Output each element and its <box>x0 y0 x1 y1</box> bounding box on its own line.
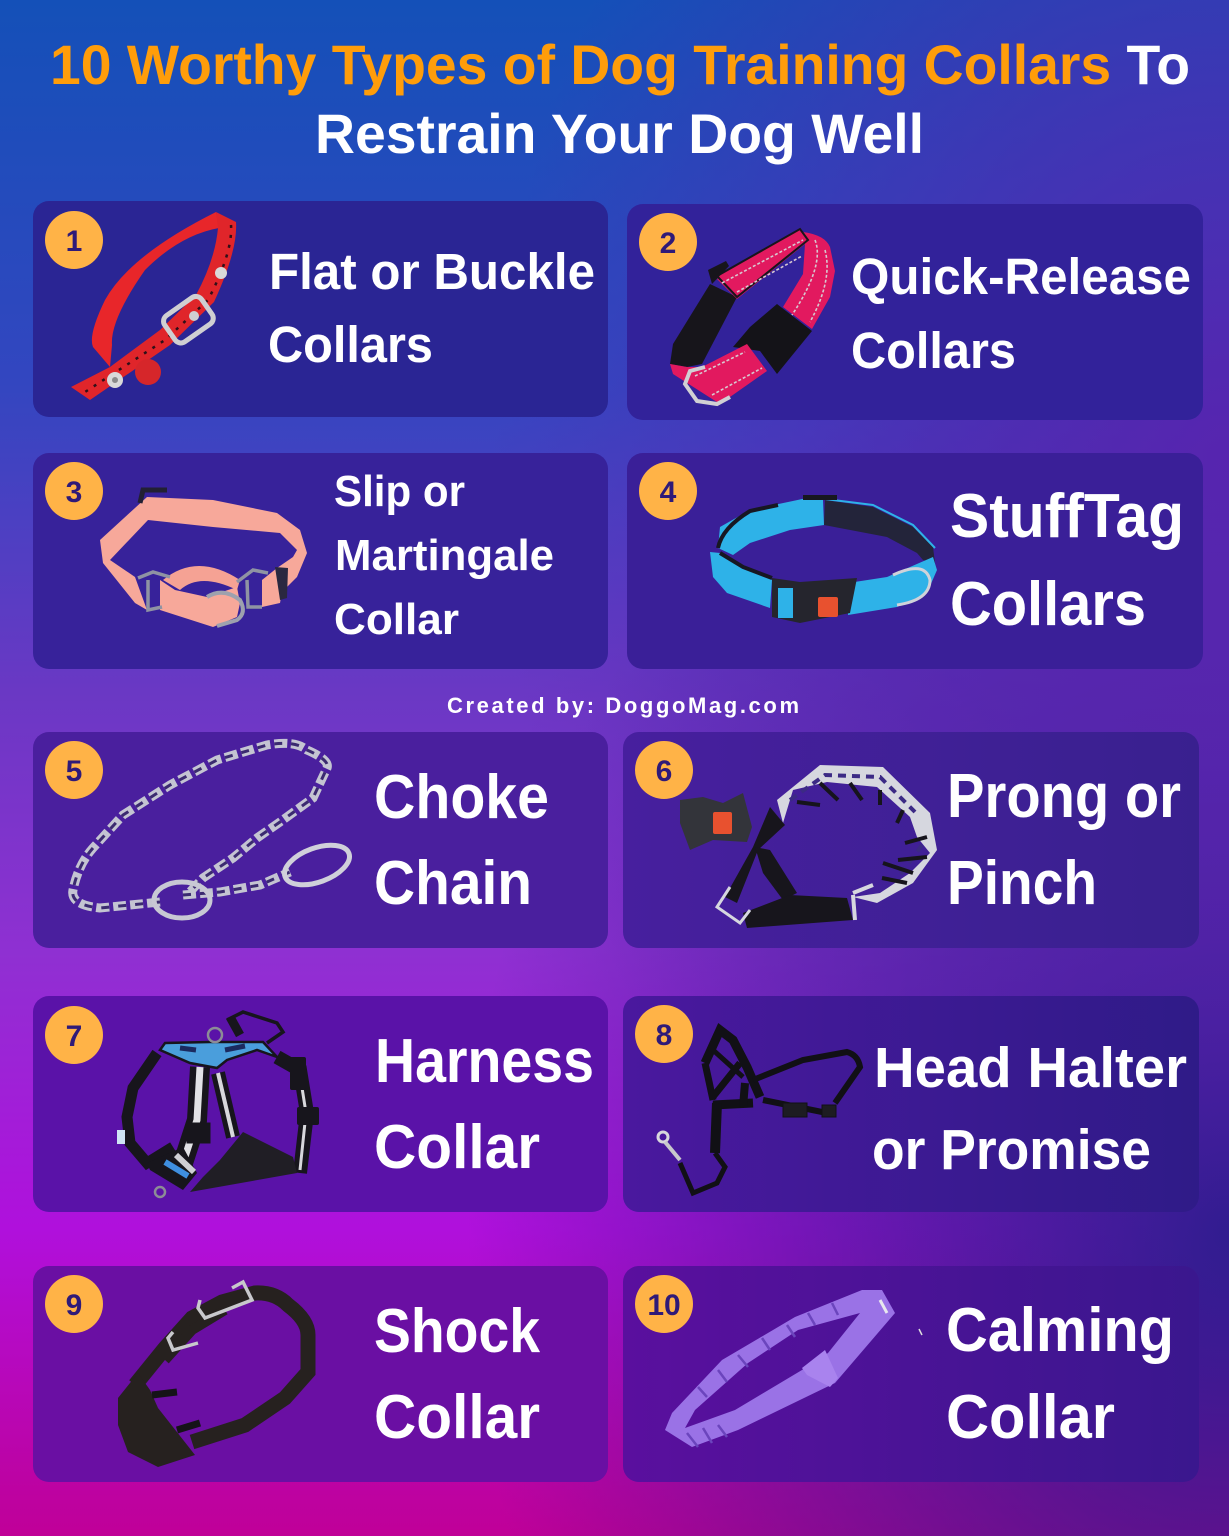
panel 1: flat or buckle <box>33 201 608 417</box>
icon: red flat collar <box>71 212 236 400</box>
panel 9: shock collar: Collar <box>374 1383 540 1452</box>
panel 5: choke chain <box>33 732 608 948</box>
panel 9: shock collar: Shock <box>374 1297 540 1366</box>
panel 5: choke chain: Chain <box>374 849 532 918</box>
icon: blue collar <box>710 495 937 623</box>
panel 10: calming collar: Collar <box>946 1383 1115 1452</box>
panel 4: stufftag: StuffTag <box>950 482 1184 551</box>
panel 8: head halter: 8 <box>656 1019 672 1052</box>
panel 5: choke chain: 5 <box>66 755 82 788</box>
panel 2: quick-release: 2 <box>660 227 676 260</box>
panel 3: slip or martingale: Martingale <box>335 531 554 580</box>
credit line: Created by: DoggoMag.com <box>447 693 799 718</box>
panel 9: shock collar: 9 <box>66 1289 82 1322</box>
panel 1: flat or buckle: Flat or Buckle <box>269 243 595 300</box>
icon: calming collar <box>665 1290 922 1447</box>
title <box>50 33 1190 165</box>
panel 8: head halter <box>623 996 1199 1212</box>
panel 6: prong or pinch: Pinch <box>947 849 1097 918</box>
title: Restrain Your Dog Well <box>315 102 924 165</box>
icon: pink martingale collar <box>100 490 307 627</box>
panel 6: prong or pinch: 6 <box>656 755 672 788</box>
panel 7: harness: Collar <box>374 1113 540 1182</box>
panel 3: slip or martingale <box>33 453 608 669</box>
panel 4: stufftag: Collars <box>950 570 1146 639</box>
title: 10 Worthy Types of Dog Training Collars To <box>50 33 1190 96</box>
panel 2: quick-release <box>627 204 1203 420</box>
panel 8: head halter: Head Halter <box>874 1036 1187 1100</box>
icon: pink quick-release collar <box>670 229 835 404</box>
icon: chain <box>73 743 355 918</box>
panel 2: quick-release: Collars <box>851 322 1016 379</box>
panel 6: prong or pinch: Prong or <box>947 762 1181 831</box>
icon: prong collar <box>680 765 937 928</box>
panel 10: calming collar: Calming <box>946 1296 1174 1365</box>
panel 7: harness <box>33 996 608 1212</box>
panel 5: choke chain: Choke <box>374 763 549 832</box>
panel 7: harness: 7 <box>66 1020 82 1053</box>
panel 3: slip or martingale: 3 <box>66 476 82 509</box>
panel 8: head halter: or Promise <box>872 1118 1151 1182</box>
icon: shock collar <box>118 1282 308 1467</box>
panel 3: slip or martingale: Slip or <box>334 467 465 516</box>
panel 6: prong or pinch <box>623 732 1199 948</box>
panel 10: calming collar <box>623 1266 1199 1482</box>
panel 7: harness: Harness <box>375 1027 594 1096</box>
icon: head halter <box>658 1030 860 1193</box>
panel 1: flat or buckle: 1 <box>66 225 82 258</box>
icon: harness <box>117 1012 319 1197</box>
panel 4: stufftag: 4 <box>660 476 677 509</box>
panel 1: flat or buckle: Collars <box>268 316 433 373</box>
panel 4: stufftag <box>627 453 1203 669</box>
panel 10: calming collar: 10 <box>647 1289 681 1322</box>
panel 3: slip or martingale: Collar <box>334 595 459 644</box>
panel 2: quick-release: Quick-Release <box>851 248 1191 305</box>
panel 9: shock collar <box>33 1266 608 1482</box>
